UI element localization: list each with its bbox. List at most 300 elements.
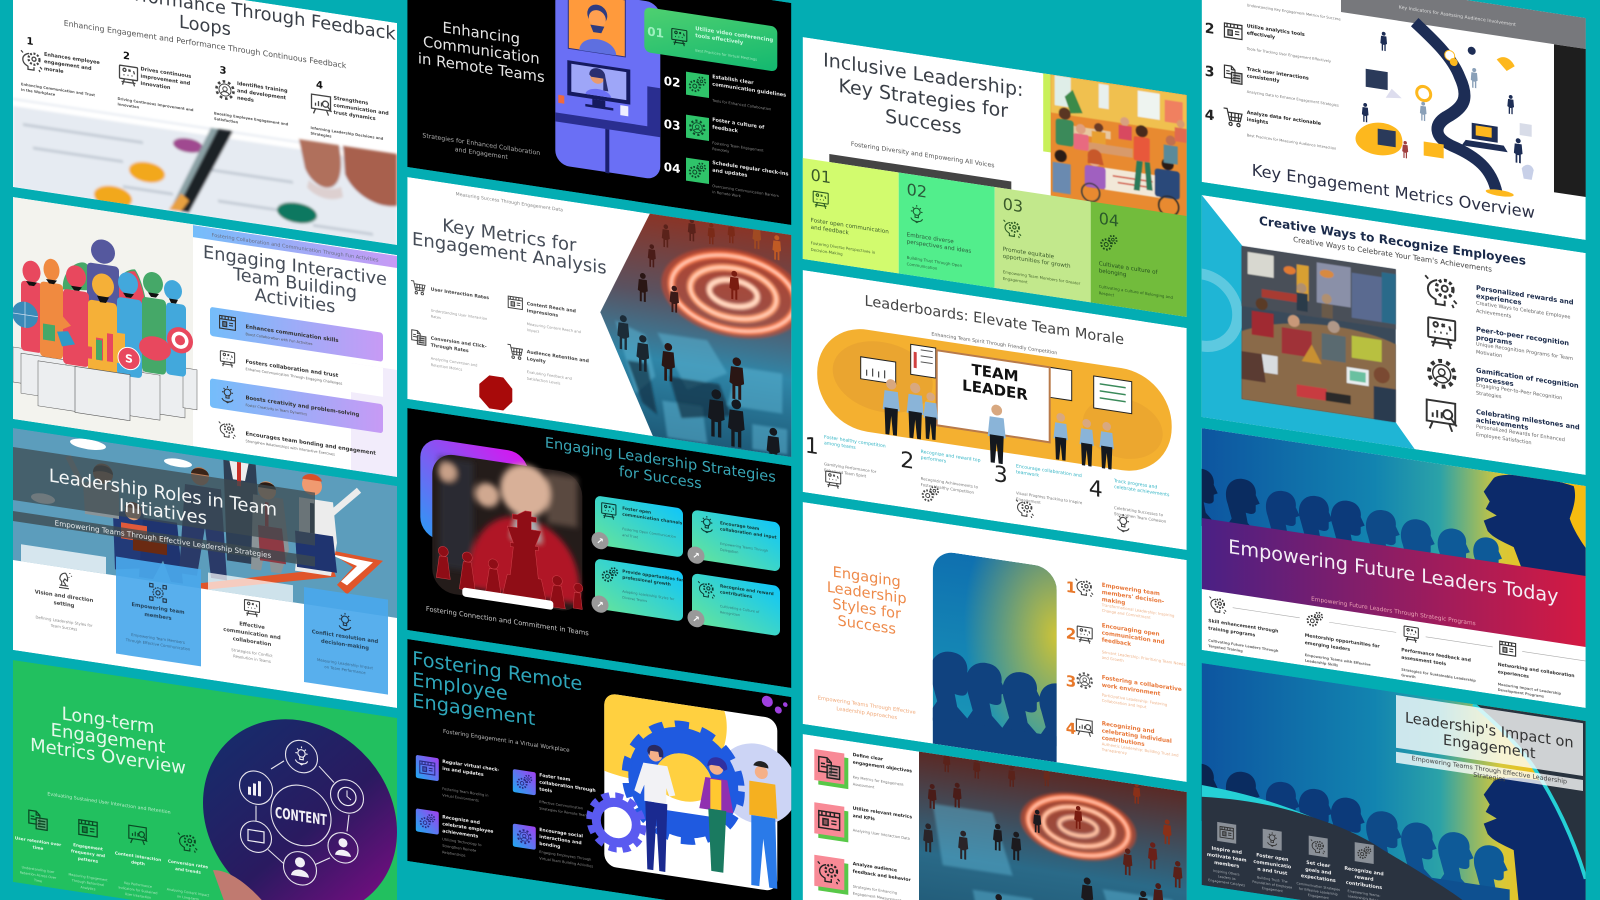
item 3 [214,66,288,126]
big profile silhouette [1484,772,1586,900]
item 3: needs [237,95,254,104]
objective 3 [814,855,911,900]
item 04: Schedule regular check-ins [712,160,788,178]
item 4: Authentic Leadership: Building Trust and [1102,741,1179,758]
metric 2: Through Behavioral [71,878,104,887]
item 02: communication guidelines [712,82,786,99]
row 1 [210,307,383,362]
photo: red chess king [432,451,583,615]
recognition 2: Motivation [1476,349,1502,359]
recognition 4: Personalized Rewards for Enhanced [1476,424,1565,443]
illustration: video call desk [555,0,660,181]
metric 3: Key Performance [124,881,152,889]
metric 1: User retention over [15,835,62,847]
leader action 3: for Effective Leadership [1299,887,1338,897]
illustration: winding roadmap [1356,13,1534,201]
item 1: 1 [805,432,819,460]
item 2 [513,768,596,819]
gradient frame [420,437,528,553]
illustration: colourful team on pedestals [13,240,198,421]
card 04: Respect [1099,290,1115,298]
row 4 [218,421,376,456]
card 1: Vision and direction [35,589,94,604]
card 4 [304,587,388,695]
metric 4 [167,831,210,900]
objective 1: Define clear [853,752,884,763]
metric 2: Measuring Content Reach and [527,322,581,334]
silhouettes [1180,760,1510,900]
item 3: Fostering a collaborative [1102,675,1182,693]
leader action 3: expectations [1301,873,1336,884]
metric 4: Conversion rates [168,858,209,870]
card 3: Adapting Leadership Styles for [622,589,675,601]
photo: inclusive classroom [1051,74,1187,219]
item 3: teamwork [1016,469,1039,479]
card 01: and feedback [811,225,849,237]
item 3: 3 [994,461,1008,489]
card 02: Embrace diverse [907,232,954,245]
row 2: Enhance Communication Through Engaging Challenges [246,367,343,386]
item 4: 4 [1205,107,1215,124]
item 04: Overcoming Communication Barriers [712,184,779,198]
recognition 2: Unique Recognition Programs for Team [1476,341,1573,362]
item 2: Innovation [118,102,140,110]
metric 2: Engagement [73,842,103,852]
title box [1396,695,1583,776]
subtitle: and Engagement [455,146,508,161]
item 2: Foster Healthy Competition [921,482,975,495]
program 1: Targeted Training [1208,644,1243,653]
dark upper right corner with teal curve [1473,704,1586,879]
recognition 4: Employee Satisfaction [1476,432,1532,446]
item 1: among teams [824,440,856,451]
card 2 [116,557,201,666]
item 3: Recognize and [442,814,480,826]
panel: engaging leadership strategies for success slide [407,408,791,688]
item 03: Remotely [712,147,730,154]
title band: Leadership Roles in Team [49,466,277,521]
leader action 2: Engagement [1262,886,1283,893]
objective 2 [814,800,912,852]
item 1: 1 [1066,578,1076,597]
recognition 3: Strategies [1476,390,1502,400]
item 1: Empowering team [1102,583,1160,597]
recognition 3: processes [1476,374,1514,388]
item 2: Driving Continuous Improvement and [118,97,194,112]
item 3: Participative Leadership: Fostering [1102,692,1168,707]
leader action 1: motivate team [1207,852,1246,864]
subtitle: Leadership Approaches [836,706,897,721]
card 1: Team Success [50,623,77,632]
subtitle: Evaluating Sustained User Interaction and Retention [47,791,171,816]
panel: fostering remote employee engagement slide [407,639,797,900]
title: Success [885,105,962,139]
card 02: perspectives and ideas [907,239,971,255]
item 3: 3 [1066,672,1076,691]
objective 3: Analyze audience [853,861,897,874]
panel: leadership's impact on engagement slide [1180,660,1586,900]
card 04: 04 [1099,209,1119,231]
item 3: Relationships [442,850,466,858]
program 4: Networking and collaboration [1498,662,1575,679]
card 4: Conflict resolution and [312,629,379,645]
item 3: Engagement [1016,496,1041,505]
metric 1: Retention Across Over [20,871,57,880]
title: Engagement [51,720,165,758]
card 02: Communication [907,261,938,271]
item 1: Change and Commitment [1102,608,1151,620]
recognition 1 [1425,275,1574,329]
title: Success [838,612,896,638]
item 4: interactions and [539,834,582,846]
metric 4: Audience Retention and [527,349,589,364]
card 03: Engagement [1003,276,1028,285]
title: Leaderboards: Elevate Team Morale [865,292,1124,349]
title band: Initiatives [119,495,207,529]
silhouettes [1180,465,1504,591]
title: Engagement Analysis [412,229,607,279]
card 04: Cultivating a Culture of Belonging and [1099,284,1173,300]
item 2: Recognizing Achievements to [921,476,979,490]
item 01 highlighted: Utilize video conferencing [695,26,773,44]
item 3: 3 [220,65,226,77]
card 4: decision-making [321,639,369,652]
title: Loops [179,12,231,40]
red octagon [479,374,512,412]
leader action 4: contributions [1346,880,1382,891]
leader action 4: Recognize and [1344,866,1384,878]
metric 2: Measuring Engagement [68,872,108,882]
panel: long-term engagement metrics overview slide [13,660,397,900]
card 1 [592,495,683,562]
program 2: emerging leaders [1305,640,1350,653]
row 3: Foster Creativity in Team Dynamics [246,403,307,416]
item 4: Track progress and [1113,478,1157,491]
recognition 3: Engaging Peer-to-Peer Recognition [1476,382,1562,401]
item 2: 2 [900,447,914,475]
title: Engaging [833,564,901,591]
card 1 [34,572,93,631]
card 01 [803,158,899,273]
item 1: engagement and [44,59,92,72]
metric 3: Analyzing Conversion and [431,357,477,368]
card 3: Strategies for Conflict [231,647,273,658]
item 1: Enhanced Team Spirit [824,467,867,479]
row 4: Strengthen Relationships with Interactive Exercises [246,439,335,457]
program 3 [1401,626,1493,691]
row 3 [210,378,383,433]
card 3: Provide opportunities for [622,568,684,584]
leader action 3: goals and [1305,867,1332,877]
photo: crowd around glowing target [600,201,805,471]
item 2: performers [921,455,947,465]
metric 4: Analyzing Content Impact [167,887,210,898]
item 02: Tools for Enhanced Collaboration [711,98,771,111]
subtitle: Fostering Connection and Commitment in Teams [426,605,589,637]
card 4: Recognize and reward [720,583,774,597]
leader action 2: Building Trust: The [1257,875,1288,884]
metric 4: Evaluating Feedback and [527,370,572,381]
item 02: 02 [664,74,680,90]
card 1: Fostering Open Communication [622,527,676,539]
panel: engaging interactive team building activities slide [12,197,397,477]
metric 1: time [33,844,43,851]
item 4: Strengthens [334,95,368,107]
recognition 2 [1428,317,1573,370]
item 1: in the Workplace [21,88,56,97]
title: Metrics Overview [30,735,186,779]
item 2 [1205,17,1332,64]
subtitle: Creative Ways to Celebrate Your Team's Achievements [1293,235,1492,274]
metric 4: Satisfaction Levels [527,377,560,386]
title: in Remote Teams [418,49,545,86]
title: Fostering Remote [412,647,582,695]
item 2: 2 [1205,21,1214,38]
card 03 [995,187,1091,302]
item 1: Enhancing Communication and Trust [21,82,95,97]
program 1 [1208,596,1300,662]
leader action 2: n and trust [1257,866,1288,877]
item 2: Effective Communication [539,800,583,811]
card 4 [688,572,780,640]
subtitle: Empowering Teams Through Effective [818,695,916,716]
program 4: Measuring Impact of Leadership [1498,682,1562,696]
item 1: Fostering Team Bonding in [442,787,488,798]
metric 2: frequency and [71,848,105,858]
item 4: Celebrating Successes to [1114,505,1164,517]
title: Creative Ways to Recognize Employees [1259,214,1526,268]
metric 2: Impact [527,328,540,334]
item 2: Foster team [539,772,571,783]
card 04: Cultivate a culture of [1099,261,1159,276]
card 4: Measuring Leadership Impact [317,657,374,670]
item 3: Collaboration and Input [1102,698,1147,709]
title band [1202,518,1586,647]
card 02 [899,172,995,288]
program 3: Growth [1401,673,1416,679]
metric 2 [508,296,581,340]
card 2: Delegation [720,548,738,554]
gradient panel with silhouettes [925,548,1079,766]
item 4: Best Practices for Measuring Audience Interaction [1247,133,1336,151]
item 4: Strategies [310,131,332,139]
metric 2: Analytics [81,885,96,891]
row 1: Boost Collaboration with Fun Activities [246,332,313,346]
item 1 [416,755,499,806]
card 2: Empowering team [131,602,185,616]
item 2: Recognize and reward top [921,449,981,464]
metric 2 [68,818,108,893]
panel: engaging leadership styles for success slide [803,502,1187,782]
row 2 [220,350,383,397]
panel: key engagement metrics overview slide [1202,0,1586,240]
item 4: trust dynamics [334,110,376,122]
item 01 highlighted: tools effectively [695,33,744,46]
item 4: insights [1247,117,1268,126]
dark curved footer [1202,785,1502,900]
item 2: collaboration through [539,779,596,794]
card 3 [223,596,281,665]
illustration: colourful team on pedestals: S [125,352,133,366]
item 04: 04 [664,160,680,176]
leader action 1 [1207,820,1246,888]
illustration: team leader whiteboard [817,322,1172,490]
item 3: Satisfaction [214,117,239,125]
objective 2: Utilize relevant metrics [853,806,912,821]
subtitle band [13,511,315,567]
item 1: making [1102,597,1125,607]
leader action 1: Engagement Catalysts [1208,878,1246,888]
metric 4: Loyalty [527,356,546,365]
item 2: 2 [1066,624,1076,644]
title band: Empowering Future Leaders Today [1228,535,1559,608]
item 2: Tools for Tracking User Engagement Effectively [1246,47,1332,64]
whiteboard lettering: TEAM [972,361,1018,386]
card 4: ↗ [692,615,700,626]
item 1 [20,37,100,96]
item 1 [805,431,886,496]
item 02 [664,72,786,110]
title: Key Metrics for [442,215,577,257]
card 2: Empowering Team Members [131,632,185,645]
metric 3 [412,330,487,375]
recognition 4 [1427,399,1580,454]
title: Communication [423,32,540,68]
item 01 highlighted [644,7,777,72]
metric 1: User Interaction Rates [431,287,489,301]
recognition 4: achievements [1476,416,1528,432]
subtitle: Enhancing Team Spirit Through Friendly Competition [931,331,1057,356]
recognition 1: Creative Ways to Celebrate Employee [1476,300,1570,321]
subtitle band: Empowering Teams Through Effective Leadership [1412,755,1567,786]
leader action 2: Foster open [1256,852,1289,863]
item 3: Utilizing Technology to [442,837,482,847]
leader action 2: Foundation of Employee [1252,880,1292,890]
item 3 [1066,670,1182,715]
card 2: ↗ [692,551,700,562]
leader action 4: Empowering Teams: [1348,889,1380,898]
recognition 4: Celebrating milestones and [1476,408,1580,432]
program 3: Performance feedback and [1401,647,1471,664]
metric 4: and trends [175,866,201,875]
program 2: Empowering Teams with Effective [1305,653,1371,667]
teal corner shape [1166,190,1415,449]
panel: enhancing communication in remote teams slide [407,0,791,225]
metric 2: patterns [78,856,99,864]
illustration: team with gears [589,690,797,895]
item 4 [1066,716,1179,763]
card 01: 01 [811,165,831,187]
card 02: 02 [907,180,927,202]
panel: creative ways to recognize employees slide [1166,190,1586,475]
metric 3: Content interaction [115,850,161,862]
title: Enhancing [443,18,520,48]
card 03: opportunities for growth [1003,254,1071,270]
item 2: Servant Leadership: Prioritizing Team Needs [1102,649,1185,667]
card 4: Recognition [720,610,740,617]
title: Inclusive Leadership: [823,48,1023,101]
objective 3: feedback and behavior [853,869,911,883]
card 1: setting [54,600,75,609]
recognition 2: programs [1476,333,1512,347]
photo: hand marking feedback form [13,96,397,251]
program 4: Development Programs [1498,688,1544,699]
item 1: 1 [27,36,33,48]
panel: inclusive leadership key strategies slide [803,37,1187,317]
item 4: Transparency [1101,747,1128,756]
item 3: Track user interactions [1247,66,1309,82]
subtitle band: Empowering Teams Through Effective Leadership Strategies [55,518,272,560]
item 2: 2 [123,51,130,63]
panel: leaderboards elevate team morale slide [803,270,1187,550]
content cycle circle: CONTENT [275,804,327,829]
card 4: contributions [720,589,753,600]
metric 1 [411,281,489,327]
item 4: contributions [1102,736,1145,748]
card 2: collaboration and input [720,526,777,541]
objective 1 [814,746,912,799]
card 3: ↗ [596,600,604,611]
item 3: work environment [1102,683,1161,698]
card 3 [592,558,684,625]
item 02: Establish clear [712,74,754,86]
title: Engaging Leadership Strategies [545,434,776,486]
item 2: communication and [1102,630,1165,646]
item 4: celebrate achievements [1114,484,1170,498]
title: Key Strategies for [839,74,1008,123]
recognition 1: Achievements [1476,308,1512,320]
item 2: and Growth [1102,655,1124,663]
title: Team Building [232,264,357,303]
program 4: experiences [1498,669,1529,680]
objective 2: and KPIs [853,813,875,822]
item 1 [1066,577,1175,624]
item 3: achievements [442,828,478,840]
illustration: business team riding arrow [31,438,383,594]
item 04: and updates [712,168,747,179]
title: Activities [255,285,335,318]
card 3: Diverse Teams [622,595,647,603]
program 4 [1498,641,1586,705]
recognition 1: Personalized rewards and [1476,284,1574,307]
leader action 1: Leaders as [1218,874,1236,881]
program 1: Skill enhancement through [1208,618,1278,635]
panel: engagement objectives slide with target photo [803,729,1187,900]
program 2: Mentorship opportunities for [1305,633,1380,650]
big profile silhouette [1484,469,1586,578]
content cycle circle [203,706,397,900]
item 2: tools [539,786,552,794]
top band [193,225,397,268]
subtitle: Fostering Engagement in a Virtual Workplace [443,729,570,754]
objective 2: Analyzing User Interaction Data [853,828,910,841]
card 1: ↗ [596,537,604,548]
card 2: Through Effective Communication [125,637,191,652]
panel: empowering future leaders today slide [1180,423,1586,708]
item 4: Engaging Employees Through [539,850,591,862]
metric 3: Conversion and Click- [431,336,487,350]
title band: Empowering Future Leaders Through Strategic Programs [1311,597,1476,627]
item 03: feedback [712,125,739,135]
photo: busy creative office [1242,246,1396,422]
item 2: Strategies for Remote Teams [539,806,590,818]
item 1: Foster healthy competition [824,434,886,450]
item 4: Strengthen Team Cohesion [1114,511,1167,524]
subtitle: Fostering Diversity and Empowering All Voices [851,141,995,169]
card 04 [1091,201,1187,317]
card 03: Empowering Team Members for Greater [1003,269,1081,286]
item 4 [1089,474,1170,539]
